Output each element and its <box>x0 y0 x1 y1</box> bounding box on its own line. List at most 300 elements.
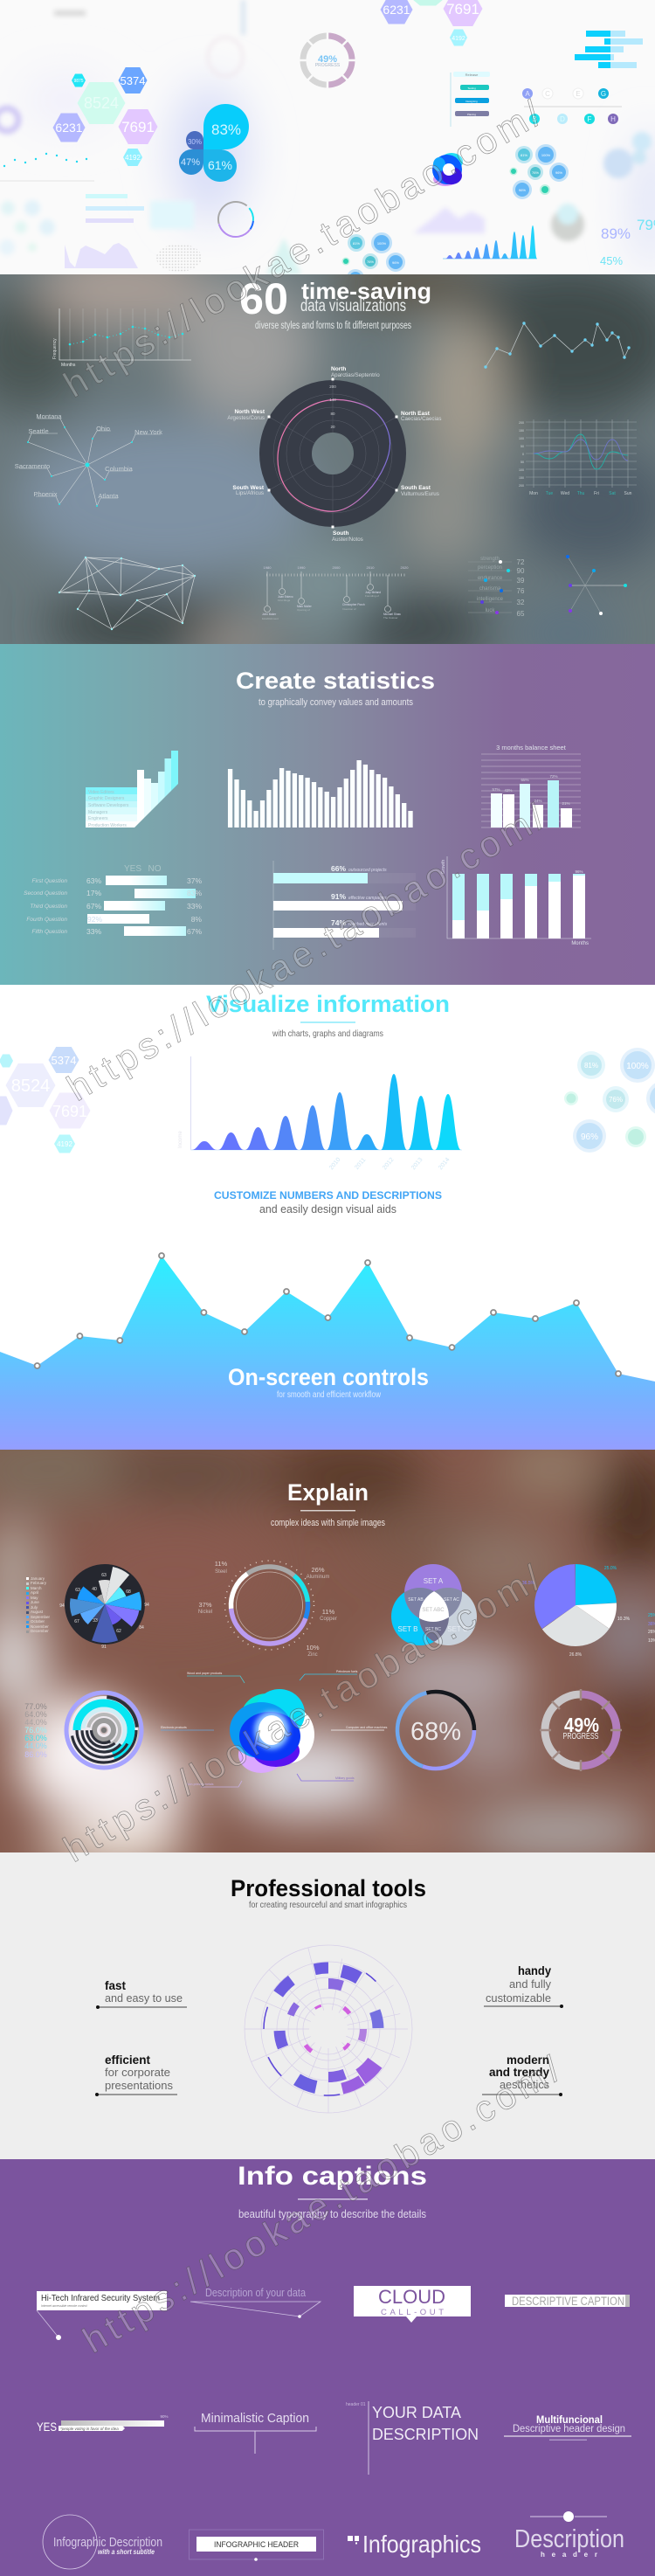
yes no bar chart: First Question <box>32 878 67 884</box>
history timeline: Establishment <box>262 617 279 620</box>
day axis chart: 200 <box>519 484 524 488</box>
polar chart legend: July <box>31 1605 38 1610</box>
caption: handy: handy <box>518 1964 551 1977</box>
caption: your data description: DESCRIPTION <box>372 2425 479 2443</box>
day axis chart: Wed <box>561 491 569 496</box>
table column chart: Video Editors <box>88 790 114 795</box>
horizontal progress bars <box>273 861 416 950</box>
watermark: https://lookae.taobao.com/ <box>60 796 551 1109</box>
map percentages: 45% <box>600 254 623 267</box>
overlapping circles chart <box>230 1689 314 1773</box>
day axis chart <box>519 419 637 496</box>
lettered timeline: E <box>576 90 581 98</box>
heading: beautiful typography to describe the details <box>238 2208 426 2220</box>
hexagon cluster left: 6231 <box>55 121 83 135</box>
caption: description header <box>514 2511 624 2559</box>
caption: modern and trendy: and trendy <box>489 2066 549 2079</box>
68 percent ring: 68% <box>410 1718 461 1746</box>
percentage bubbles right <box>510 144 569 199</box>
hexagon cluster left: 8524 <box>84 94 119 112</box>
metals ring chart: Nickel <box>198 1610 212 1615</box>
heading: Create statistics <box>236 668 435 694</box>
star label chart: Ohio <box>96 425 110 433</box>
polyline chart top right <box>484 322 631 369</box>
metals ring chart: 37% <box>198 1601 212 1609</box>
polar area chart: 63 <box>101 1573 107 1578</box>
customize caption <box>214 1189 442 1215</box>
caption: handy: customizable <box>486 1991 551 2005</box>
concentric chart values: 44.0% <box>24 1742 47 1750</box>
yes no bar chart: 63% <box>86 876 101 885</box>
day axis chart: 50 <box>521 460 524 464</box>
polar area chart: 62 <box>116 1629 121 1634</box>
history timeline: Invention of <box>342 607 356 611</box>
radar wind chart: 80 <box>330 412 335 416</box>
step diagram: Planing <box>467 113 476 116</box>
section: visualize information <box>0 991 655 1450</box>
venn diagram: SET A <box>424 1577 444 1585</box>
column chart <box>231 760 410 828</box>
metals ring chart: Copper <box>320 1617 337 1622</box>
dotted line chart with axes: Frequency <box>52 338 58 359</box>
lettered timeline: A <box>525 90 530 98</box>
overlapping chart leader lines: Petroleum fuels <box>336 1670 358 1673</box>
section: hero collage <box>0 0 655 274</box>
caption: efficient: for corporate <box>105 2066 170 2079</box>
heading: to graphically convey values and amounts <box>259 697 413 708</box>
horizontal progress bars: 66% <box>331 864 346 873</box>
pie chart <box>522 1566 655 1658</box>
radar wind chart: Argestes/Corus <box>227 415 265 421</box>
map percentages <box>600 217 655 267</box>
faded hexagons: 4192 <box>57 1140 72 1148</box>
percentage bubbles right: 76% <box>532 170 539 175</box>
polar chart legend: June <box>31 1600 39 1604</box>
blurred background tints <box>22 74 655 271</box>
section: explain <box>0 1450 655 1852</box>
caption: yes bar: *people voting in favor of the idea <box>60 2427 119 2431</box>
hexagon cluster top: 4192 <box>452 36 465 42</box>
caption: fast: and easy to use <box>105 1991 183 2005</box>
history timeline: 1980 <box>264 565 272 570</box>
day axis chart: 50 <box>521 445 524 448</box>
progress ring small <box>211 195 260 244</box>
table column chart: Engineers <box>88 816 108 821</box>
blurred photo background <box>0 1433 655 1870</box>
faded bubbles: 76% <box>609 1096 623 1104</box>
history timeline: Christopher Porch <box>342 603 365 606</box>
caption: efficient: efficient <box>105 2053 150 2067</box>
caption: modern and trendy: aesthetics <box>500 2078 549 2091</box>
table column chart <box>86 751 178 828</box>
overlapping chart leader lines <box>161 1670 388 1787</box>
attribute sliders: charisma <box>479 586 501 592</box>
yes no bar chart: Fourth Question <box>26 917 67 923</box>
yes no bar chart: 17% <box>86 889 101 897</box>
day axis chart: Sun <box>624 491 632 496</box>
stacked growth chart: Growth <box>441 860 446 874</box>
day axis chart: 100 <box>519 468 524 472</box>
percentage bubbles bottom: 81% <box>353 241 360 246</box>
percentage bubbles right: 96% <box>555 170 562 175</box>
faded hexagons: 8524 <box>11 1077 50 1096</box>
attribute sliders: 72 <box>517 558 525 566</box>
polar chart legend: October <box>31 1619 45 1624</box>
watermark: https://lookae.taobao.com/ <box>76 2048 567 2361</box>
radial segmented chart <box>235 1935 422 2122</box>
caption: your data description: header 01 <box>346 2402 366 2407</box>
radar wind chart <box>227 366 441 543</box>
balance sheet chart: 21% <box>562 801 570 806</box>
lettered timeline <box>522 88 622 124</box>
horizontal progress bars: 74% <box>331 918 346 927</box>
hexagon cluster top: 6231 <box>383 3 410 17</box>
overlapping chart leader lines: Wood and paper products <box>187 1672 222 1675</box>
caption: infographic description circle: Infographic Description <box>53 2536 162 2550</box>
pie chart: 25.0% <box>604 1566 617 1571</box>
attribute sliders: endurance <box>478 576 503 581</box>
yes no bar chart: 67% <box>187 927 202 936</box>
heading: Visualize information <box>206 991 450 1017</box>
concentric chart values: 76.0% <box>24 1726 47 1735</box>
income peak chart: 2011 <box>354 1157 367 1171</box>
polar area chart: 94 <box>144 1603 149 1608</box>
hexagon cluster left: 4192 <box>125 154 141 162</box>
radar wind chart: Lips/Africus <box>236 490 264 496</box>
caption: infographic header <box>189 2530 323 2561</box>
history timeline: 1990 <box>298 565 306 570</box>
hexagon cluster top <box>381 0 482 45</box>
49 percent donut: 49% <box>564 1714 599 1736</box>
progress donut 49% <box>299 31 356 89</box>
horizontal bars <box>86 194 144 223</box>
attribute sliders: strength <box>480 557 500 562</box>
map percentages: 89% <box>601 225 631 242</box>
hexagon cluster left: 9875 <box>73 79 84 84</box>
polar area chart: 68 <box>126 1589 131 1595</box>
balance sheet chart: 72% <box>549 774 558 779</box>
history timeline: 2020 <box>401 565 409 570</box>
caption: hi-tech: Hi-Tech Infrared Security System <box>41 2293 160 2303</box>
radar wind chart: Aparctias/Septentrio <box>331 372 380 378</box>
caption: infographic description circle <box>43 2515 162 2569</box>
caption: efficient: presentations <box>105 2079 173 2092</box>
49 percent donut: PROGRESS <box>562 1732 599 1742</box>
peak chart small <box>443 225 537 259</box>
percentage bubbles right: 81% <box>521 153 527 157</box>
history timeline: Juan Estevo <box>278 595 293 599</box>
68 percent ring <box>387 1681 485 1779</box>
caption: description of your data <box>190 2286 321 2318</box>
lettered timeline: F <box>588 115 592 123</box>
polar area chart: 63 <box>75 1588 80 1593</box>
faded bubbles: 100% <box>626 1062 649 1071</box>
faded bubbles <box>564 1048 655 1153</box>
star label chart: Sacramento <box>15 462 50 470</box>
overlapping chart leader lines: Military goods <box>335 1776 355 1780</box>
history timeline <box>262 565 409 620</box>
concentric chart values: 63.0% <box>24 1734 47 1742</box>
polar area chart: 94 <box>59 1603 65 1609</box>
star label chart: Atlanta <box>98 492 119 500</box>
percentage bubbles bottom: 100% <box>377 241 387 246</box>
watermark <box>57 93 567 2361</box>
venn diagram <box>391 1564 477 1645</box>
caption: minimalistic <box>195 2411 316 2454</box>
polar chart legend: September <box>31 1615 51 1619</box>
heading: Explain <box>287 1479 369 1506</box>
caption: handy <box>484 1964 563 2008</box>
percentage bubbles right: 96% <box>519 188 526 192</box>
step diagram <box>451 72 490 127</box>
caption: modern and trendy <box>482 2053 562 2096</box>
petal percentage chart: 47% <box>181 157 200 168</box>
heading <box>206 991 450 1039</box>
section: info captions <box>0 2159 655 2576</box>
balance sheet chart: 65% <box>521 778 529 782</box>
polar area chart <box>59 1564 149 1650</box>
venn diagram: SET ABC <box>422 1608 445 1613</box>
yes no bar chart: 37% <box>187 876 202 885</box>
polar chart legend: January <box>31 1576 45 1581</box>
dotted line chart <box>0 153 94 181</box>
caption: handy: and fully <box>509 1977 551 1991</box>
overlapping chart leader lines: Computer and office machines <box>346 1726 388 1729</box>
history timeline: John Baker <box>262 613 277 616</box>
attribute sliders: 65 <box>517 610 525 618</box>
radar wind chart: Caecias/Caecias <box>401 416 441 422</box>
six point star chart <box>566 555 627 615</box>
polar chart legend <box>26 1576 51 1633</box>
venn diagram: SET B <box>398 1625 417 1633</box>
polar chart legend: March <box>31 1586 42 1590</box>
star label chart: Columbia <box>105 465 134 473</box>
day axis chart: 0 <box>522 453 524 456</box>
history timeline: First Mega <box>278 599 291 602</box>
radar wind chart: Vulturnus/Eurus <box>401 491 439 497</box>
stacked growth chart: 96% <box>575 869 583 874</box>
attribute sliders: intelligence <box>477 597 504 602</box>
caption: fast: fast <box>105 1979 126 1992</box>
venn diagram: SET C <box>447 1625 468 1633</box>
stacked growth chart <box>441 856 591 946</box>
heading <box>238 2162 427 2220</box>
caption: infographic description circle: with a short subtitle <box>98 2548 155 2556</box>
hexagon cluster top: 7691 <box>446 1 479 17</box>
star label chart: New York <box>134 428 162 436</box>
attribute sliders: 32 <box>517 599 525 606</box>
radar wind chart: North West <box>234 409 265 415</box>
percentage bubbles bottom <box>342 232 405 287</box>
step diagram: Release <box>465 73 479 77</box>
concentric chart values: 44.0% <box>24 1718 47 1727</box>
table column chart: Software Developers <box>88 803 129 808</box>
caption: cloud call-out: CLOUD <box>378 2286 445 2308</box>
metals ring chart: Zinc <box>307 1652 318 1658</box>
polar chart legend: April <box>31 1590 38 1595</box>
caption: description of your data: Description of your data <box>205 2286 307 2299</box>
faded hexagons: 5374 <box>52 1054 76 1067</box>
on-screen controls heading: for smooth and efficient workflow <box>277 1390 382 1400</box>
caption: hi-tech: Internet accessible remote control <box>41 2304 87 2308</box>
history timeline: Mark Muller <box>297 605 313 608</box>
petal percentage chart <box>179 104 249 182</box>
heading <box>271 1479 385 1528</box>
caption: yes bar: 90% <box>160 2414 169 2419</box>
attribute sliders: luck <box>486 608 495 613</box>
concentric ring chart <box>66 1693 141 1768</box>
metals ring chart <box>198 1551 337 1659</box>
balance sheet chart: 57% <box>492 787 500 792</box>
yes no bar chart: 83% <box>187 889 202 897</box>
caption: description header: Description <box>514 2525 624 2553</box>
day axis chart: Sat <box>609 491 616 496</box>
metals ring chart: 26% <box>311 1566 325 1574</box>
day axis chart: Thu <box>577 491 585 496</box>
yes no bars top right <box>575 31 643 68</box>
pie chart: 26.8% <box>569 1652 583 1658</box>
polar chart legend: November <box>31 1624 49 1629</box>
attribute sliders: perception <box>478 565 502 571</box>
yes no bar chart: Third Question <box>30 904 67 910</box>
caption: yes bar <box>37 2414 169 2434</box>
hexagon cluster left: 7691 <box>121 119 155 135</box>
yes no bar chart: 33% <box>187 902 202 911</box>
pie chart: 10.3% <box>617 1617 631 1622</box>
customize caption: and easily design visual aids <box>259 1202 396 1215</box>
income peak chart: 2013 <box>410 1157 424 1171</box>
radar wind chart: South West <box>232 485 265 491</box>
caption: fast <box>96 1979 187 2009</box>
on-screen controls heading: On-screen controls <box>228 1364 429 1390</box>
day axis chart: 150 <box>519 429 524 433</box>
day axis chart: 200 <box>519 421 524 425</box>
polar area chart: 33 <box>93 1618 98 1624</box>
day axis chart: Fri <box>594 491 599 496</box>
faded bubbles: 81% <box>584 1062 598 1070</box>
table column chart: Production Workers <box>88 823 127 828</box>
caption: multifuncional: Descriptive header design <box>513 2424 625 2434</box>
polar area chart: 86 <box>121 1575 127 1581</box>
venn diagram: SET AB <box>408 1597 424 1603</box>
title 60 time-saving: data visualizations <box>300 297 406 315</box>
table column chart: Managers <box>88 810 108 815</box>
caption: efficient <box>95 2053 177 2096</box>
percentage bubbles right: 100% <box>541 153 551 157</box>
metals ring chart: 10% <box>306 1644 320 1652</box>
watermark: https://lookae.taobao.com/ <box>57 93 548 405</box>
dot map <box>156 244 202 272</box>
blurred photo background <box>0 249 655 664</box>
yes no bar chart: YES <box>124 864 141 874</box>
percentage bubbles bottom: 76% <box>367 260 374 264</box>
heading: with charts, graphs and diagrams <box>272 1028 383 1039</box>
balance sheet chart <box>481 744 581 828</box>
on-screen controls heading <box>228 1364 429 1400</box>
lettered timeline: G <box>601 90 606 98</box>
overlapping chart leader lines: Non-primary metals <box>187 1783 214 1786</box>
faded hexagons: 7691 <box>52 1103 87 1120</box>
history timeline: 2000 <box>333 565 341 570</box>
horizontal progress bars: 91% <box>331 892 346 901</box>
pie chart: 36.5% <box>522 1581 535 1586</box>
caption: modern and trendy: modern <box>507 2053 549 2067</box>
polar area chart: 91 <box>101 1645 107 1650</box>
heading: complex ideas with simple images <box>271 1518 385 1528</box>
lettered timeline: C <box>545 90 550 98</box>
on-screen controls area chart <box>0 1253 655 1450</box>
history timeline: Founding of <box>365 594 379 598</box>
balance sheet chart: 24% <box>534 799 542 803</box>
heading: for creating resourceful and smart infographics <box>249 1900 407 1910</box>
dotted line chart with axes: Months <box>61 363 76 368</box>
history timeline: Opening of <box>297 608 310 612</box>
petal percentage chart: 30% <box>188 138 202 146</box>
caption: multifuncional <box>504 2415 631 2441</box>
polar chart legend: December <box>31 1629 49 1633</box>
concentric chart values: 64.0% <box>24 1710 47 1719</box>
network diagram <box>59 557 196 630</box>
balance sheet chart: 3 months balance sheet <box>496 744 567 751</box>
star label chart: Phoenix <box>33 490 58 498</box>
radar wind chart: South <box>333 530 348 537</box>
watermark: https://lookae.taobao.com/ <box>57 1557 548 1870</box>
heading <box>236 668 435 708</box>
yes no bar chart: 92% <box>87 915 102 924</box>
metals ring chart: 11% <box>322 1608 335 1616</box>
yes no bar chart: Second Question <box>24 890 67 897</box>
title 60 time-saving: time-saving <box>301 278 431 304</box>
attribute sliders <box>468 557 525 618</box>
day axis chart: 100 <box>519 437 524 440</box>
percentage bubbles bottom: 96% <box>392 260 399 265</box>
horizontal progress bars: reached new clients <box>348 922 388 927</box>
lettered timeline: D <box>560 115 565 123</box>
attribute sliders: 76 <box>517 587 525 595</box>
income peak chart: 2010 <box>328 1157 342 1171</box>
petal percentage chart: 61% <box>208 158 232 172</box>
table column chart: Graphic Designers <box>88 796 125 801</box>
star label chart <box>15 412 162 507</box>
metals ring chart: 11% <box>215 1560 228 1568</box>
income peak chart <box>178 1056 462 1171</box>
overlapping blobs small <box>432 153 463 186</box>
history timeline: Michael Shaw <box>383 613 402 616</box>
yes no bar chart <box>24 864 202 936</box>
caption: descriptive caption: DESCRIPTIVE CAPTION <box>512 2295 624 2308</box>
horizontal progress bars: outsourced projects <box>348 868 387 873</box>
star label chart: Montana <box>36 412 62 420</box>
title 60 time-saving: 60 <box>239 274 288 323</box>
49 percent donut <box>540 1689 622 1771</box>
star label chart: Seattle <box>28 427 49 435</box>
horizontal progress bars: effective campaigns <box>348 896 388 901</box>
venn diagram: SET AC <box>444 1597 459 1603</box>
overlapping chart leader lines: Electronic products <box>161 1726 187 1729</box>
radar wind chart: 20 <box>330 425 335 429</box>
metals ring chart: Steel <box>215 1569 227 1575</box>
concentric chart values: 77.0% <box>24 1702 47 1711</box>
balance sheet chart: 43% <box>504 788 513 793</box>
history timeline: The Cutover <box>383 616 398 620</box>
yes no bar chart: NO <box>148 864 162 874</box>
caption: description header: header <box>541 2551 597 2559</box>
caption: cloud call-out <box>354 2286 471 2323</box>
day axis chart: 150 <box>519 476 524 480</box>
radar wind chart: North <box>331 366 346 372</box>
stacked growth chart: Months <box>571 941 589 946</box>
radar wind chart: North East <box>401 411 431 417</box>
